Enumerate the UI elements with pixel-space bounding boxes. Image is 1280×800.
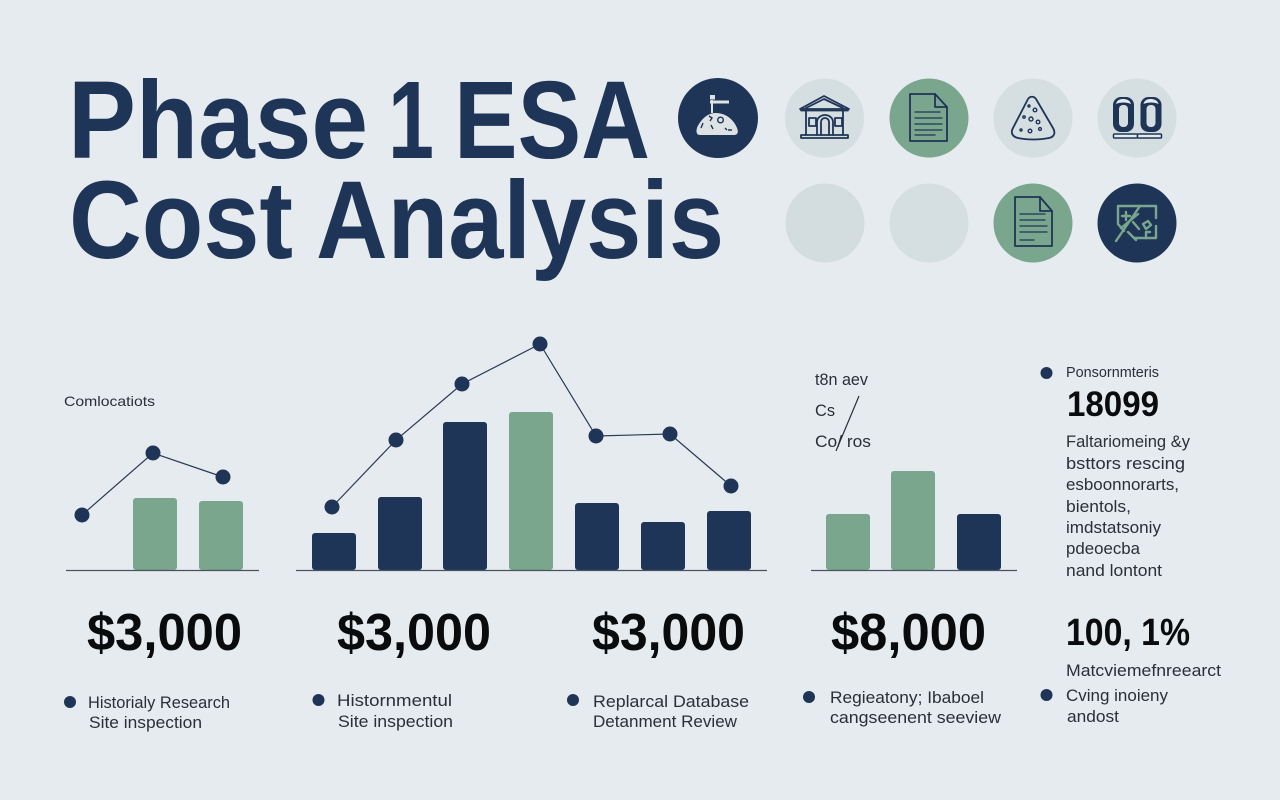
bars bbox=[133, 498, 243, 570]
trend line bbox=[324, 336, 738, 514]
cost: site inspection: Site inspection bbox=[338, 712, 453, 731]
cost: percentage note: Matcviemefnreearct bbox=[1066, 661, 1221, 680]
chart labels: Cs bbox=[815, 401, 835, 420]
icon: soil mound with flag bbox=[678, 78, 758, 158]
cost: percentage note: Cving inoieny bbox=[1066, 686, 1168, 705]
chart labels: t8n aev bbox=[815, 370, 868, 389]
title: Cost bbox=[69, 159, 293, 282]
cost: database review: Replarcal Database bbox=[593, 692, 749, 711]
cost: site inspection: $3,000 bbox=[337, 604, 491, 662]
icon: document second bbox=[994, 184, 1072, 262]
title bbox=[68, 59, 724, 282]
chart: right mini chart bbox=[811, 370, 1017, 570]
chart label: Comlocatiots bbox=[64, 393, 155, 409]
side panel: statistic and description bbox=[1040, 364, 1190, 580]
description text: Faltariomeing &y bbox=[1066, 432, 1190, 451]
cost: regulatory review: $8,000 bbox=[831, 604, 986, 662]
bars bbox=[826, 471, 1001, 570]
side panel: statistic and description: 18099 bbox=[1067, 385, 1159, 424]
cost: database review bbox=[567, 604, 749, 731]
description text: bientols, bbox=[1066, 497, 1131, 516]
title: 1 bbox=[388, 59, 434, 182]
cost: database review: Detanment Review bbox=[593, 712, 738, 731]
icon: soil sample triangle bbox=[994, 78, 1072, 158]
cost: site inspection: Histornmentul bbox=[337, 691, 452, 710]
description text bbox=[1066, 432, 1190, 580]
icon: document bbox=[890, 78, 968, 158]
chart labels bbox=[815, 370, 871, 451]
cost: historical research: Site inspection bbox=[89, 713, 202, 732]
chart: left mini chart bbox=[64, 393, 259, 570]
trend line bbox=[74, 446, 230, 522]
description text: esboonnorarts, bbox=[1066, 475, 1179, 494]
title: Analysis bbox=[316, 159, 724, 282]
cost: historical research: $3,000 bbox=[87, 604, 242, 662]
cost: percentage note bbox=[1040, 612, 1221, 726]
description text: pdeoecba bbox=[1066, 539, 1141, 558]
cost: site inspection bbox=[312, 604, 491, 731]
cost: database review: $3,000 bbox=[592, 604, 745, 662]
chart: main bar and line chart bbox=[296, 336, 767, 570]
description text: nand lontont bbox=[1066, 561, 1162, 580]
cost: regulatory review: cangseenent seeview bbox=[830, 708, 1002, 727]
icon: courthouse building bbox=[785, 78, 864, 158]
empty circle right bbox=[890, 184, 968, 262]
bars bbox=[312, 412, 751, 570]
cost: percentage note: 100, 1% bbox=[1066, 612, 1190, 654]
icon: twin cylinders bbox=[1098, 78, 1176, 158]
cost: regulatory review: Regieatony; Ibaboel bbox=[830, 688, 984, 707]
icon: site map bbox=[1098, 184, 1176, 262]
title: ESA bbox=[454, 59, 650, 182]
description text: bsttors rescing bbox=[1066, 454, 1185, 473]
cost: percentage note: andost bbox=[1067, 707, 1119, 726]
description text: imdstatsoniy bbox=[1066, 518, 1161, 537]
cost: historical research: Historialy Research bbox=[88, 693, 230, 712]
empty circle left bbox=[786, 184, 864, 262]
side panel: statistic and description: Ponsornmteris bbox=[1066, 364, 1159, 381]
cost: historical research bbox=[64, 604, 242, 732]
cost: regulatory review bbox=[803, 604, 1002, 727]
chart labels: Co/ ros bbox=[815, 432, 871, 451]
title: Phase bbox=[68, 59, 368, 182]
